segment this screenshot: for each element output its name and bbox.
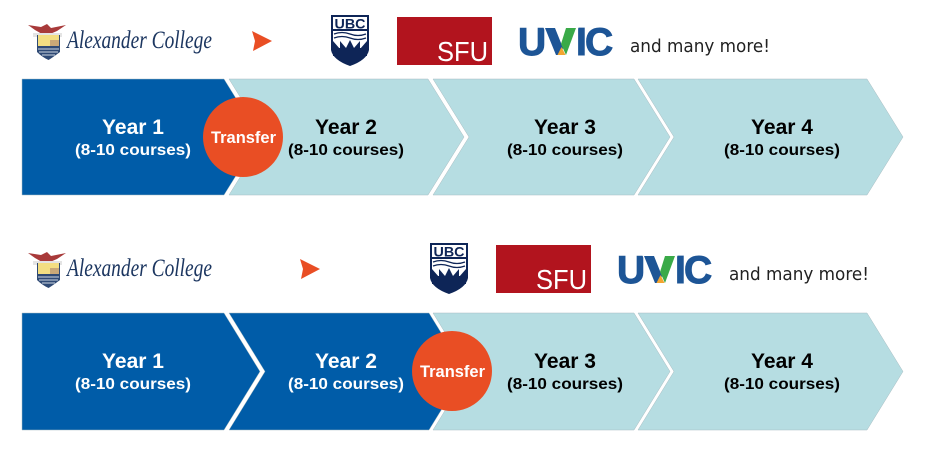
logo row: top pathway bbox=[28, 15, 770, 67]
logo: Alexander College bbox=[28, 252, 212, 288]
chevron: Year 2: (8-10 courses) bbox=[288, 142, 404, 159]
logo: UVIC: UVIC bbox=[518, 21, 613, 64]
arrow: top pathway bbox=[252, 31, 272, 51]
logo: Alexander College bbox=[28, 24, 212, 60]
chevron: Year 1: Year 1 bbox=[102, 350, 164, 373]
chevron: Year 3 bbox=[433, 79, 670, 195]
chevron: Year 3: Year 3 bbox=[534, 116, 596, 139]
logo: SFU: SFU bbox=[437, 36, 488, 67]
logo: UBC bbox=[331, 15, 369, 66]
logo: SFU bbox=[496, 245, 591, 295]
badge: Transfer after Year 1 bbox=[203, 97, 283, 177]
chevron: Year 2: Year 2 bbox=[315, 350, 377, 373]
chevron: Year 1: (8-10 courses) bbox=[75, 376, 191, 393]
chevron: Year 4 bbox=[638, 79, 903, 195]
logo: UVIC: UVIC bbox=[617, 249, 712, 292]
chevron: Year 1: Year 1 bbox=[102, 116, 164, 139]
badge: Transfer after Year 2: Transfer bbox=[420, 363, 486, 381]
logo: Alexander College: Alexander College bbox=[65, 27, 212, 54]
chevron: Year 2: Year 2 bbox=[315, 116, 377, 139]
chevron: Year 1: (8-10 courses) bbox=[75, 142, 191, 159]
logo: SFU bbox=[397, 17, 492, 67]
chevron: Year 3: Year 3 bbox=[534, 350, 596, 373]
logo: UBC bbox=[430, 243, 468, 294]
logo: Alexander College: Alexander College bbox=[65, 255, 212, 282]
chevron: Year 1 bbox=[22, 313, 260, 430]
chevron: Year 2 bbox=[229, 313, 465, 430]
chevron: Year 4: Year 4 bbox=[751, 350, 813, 373]
logo: SFU: SFU bbox=[536, 264, 587, 295]
text: and many more: and many more! bbox=[630, 36, 770, 57]
chevron: Year 3: (8-10 courses) bbox=[507, 376, 623, 393]
logo: UBC: UBC bbox=[434, 244, 464, 260]
logo row: bottom pathway bbox=[28, 243, 869, 295]
badge: Transfer after Year 1: Transfer bbox=[211, 129, 277, 147]
logo: UBC: UBC bbox=[334, 16, 366, 32]
chevron: Year 4: Year 4 bbox=[751, 116, 813, 139]
text: and many more: and many more! bbox=[729, 264, 869, 285]
arrow: bottom pathway bbox=[300, 259, 320, 279]
chevron: Year 2 bbox=[229, 79, 464, 195]
chevron: Year 3 bbox=[433, 313, 670, 430]
chevron: Year 4 bbox=[638, 313, 903, 430]
chevron: Year 3: (8-10 courses) bbox=[507, 142, 623, 159]
chevron: Year 1 bbox=[22, 79, 260, 195]
chevron: Year 4: (8-10 courses) bbox=[724, 376, 840, 393]
chevron row: bottom pathway bbox=[22, 313, 903, 430]
badge: Transfer after Year 2 bbox=[412, 331, 492, 411]
chevron: Year 4: (8-10 courses) bbox=[724, 142, 840, 159]
chevron: Year 2: (8-10 courses) bbox=[288, 376, 404, 393]
chevron row: top pathway bbox=[22, 79, 903, 195]
